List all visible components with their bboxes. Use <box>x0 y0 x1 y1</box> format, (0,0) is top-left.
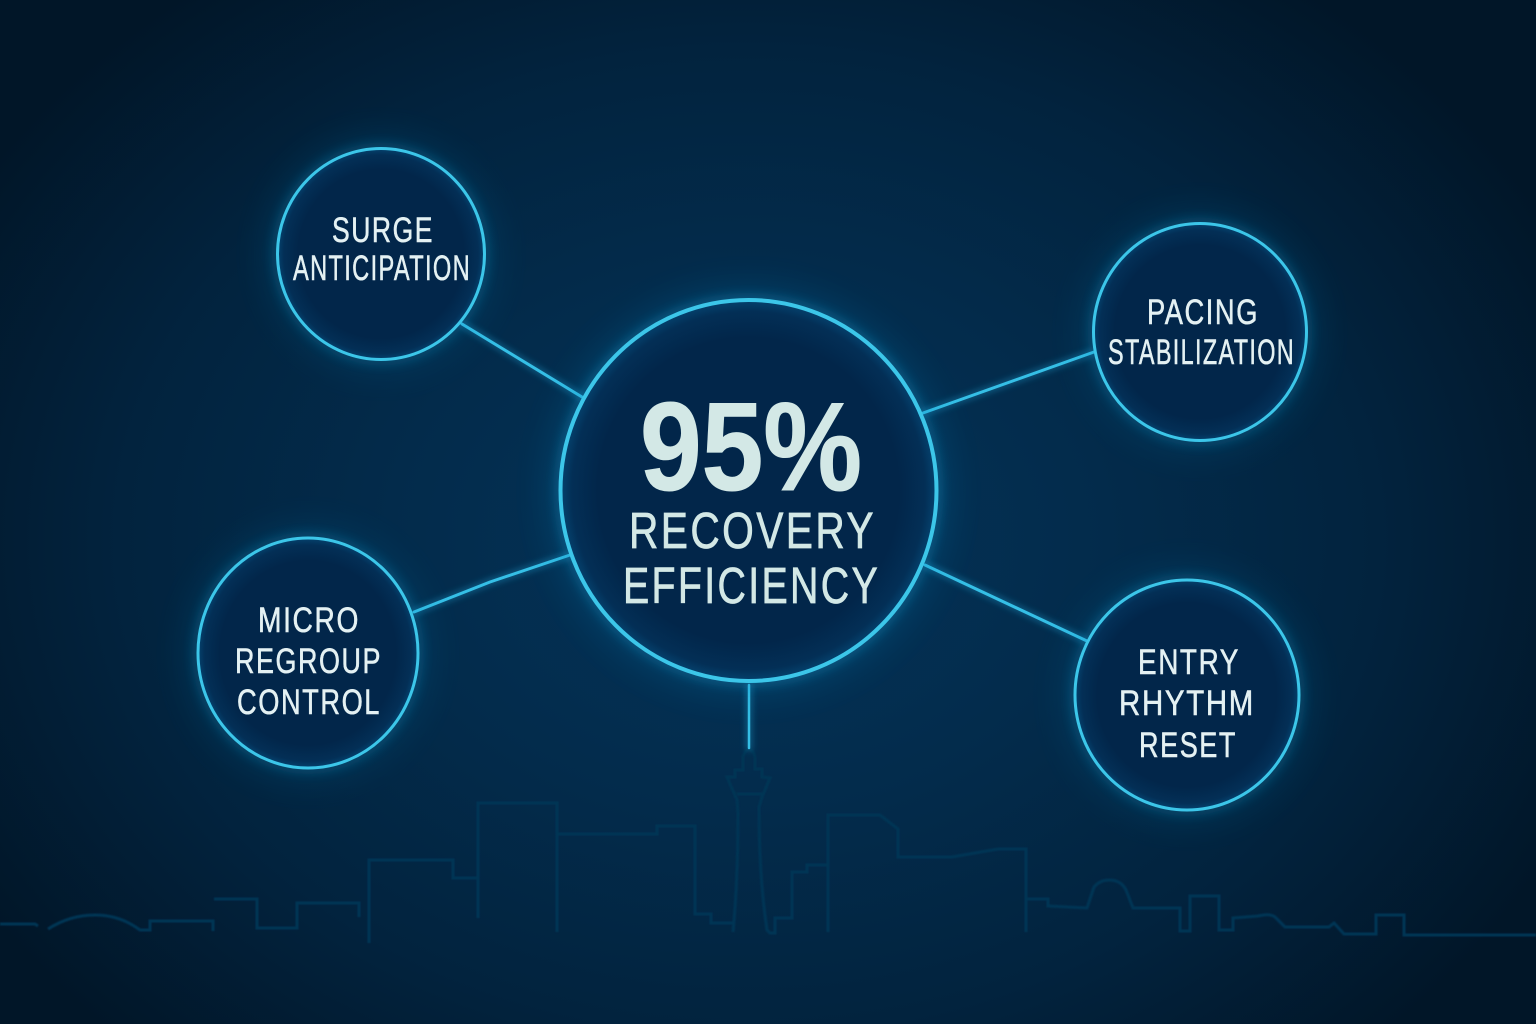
node: surge anticipation <box>278 148 484 360</box>
node: pacing stabilization <box>1094 224 1306 440</box>
node label: ENTRY <box>1138 643 1240 682</box>
node label <box>293 211 471 288</box>
node label: SURGE <box>332 211 434 250</box>
hub: 95% recovery efficiency <box>560 300 936 681</box>
skyline silhouette <box>0 749 1536 943</box>
connector lines <box>414 324 1094 748</box>
hub value: 95% <box>640 378 862 517</box>
node label: RESET <box>1139 726 1237 765</box>
hub label: RECOVERY <box>629 502 876 559</box>
hub label: EFFICIENCY <box>623 557 880 614</box>
node label: ANTICIPATION <box>293 249 471 288</box>
node label: MICRO <box>258 601 360 640</box>
node label <box>235 601 382 722</box>
hub label <box>623 502 880 614</box>
node label: CONTROL <box>237 683 381 722</box>
node label: STABILIZATION <box>1108 333 1295 372</box>
node label: REGROUP <box>235 642 382 681</box>
node label <box>1119 643 1255 765</box>
node label <box>1108 293 1295 372</box>
node label: PACING <box>1147 293 1259 332</box>
node: entry rhythm reset <box>1075 580 1299 810</box>
node label: RHYTHM <box>1119 684 1255 723</box>
node: micro regroup control <box>198 538 418 768</box>
